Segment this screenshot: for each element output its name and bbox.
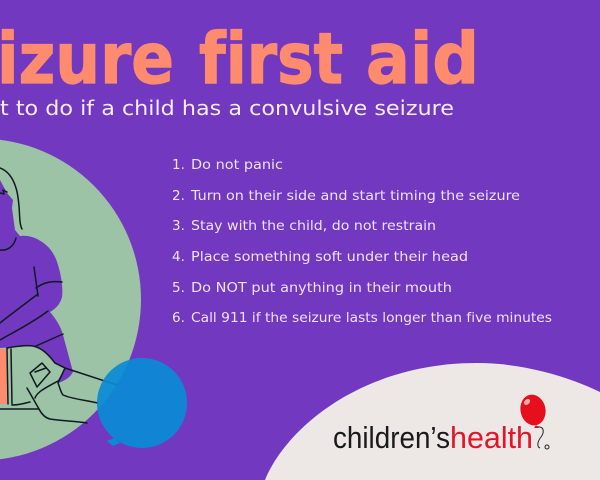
step 5: Do NOT put anything in their mouth xyxy=(191,280,452,296)
step 1: 1. xyxy=(172,157,185,173)
logo: children's health xyxy=(333,392,549,455)
person silhouette xyxy=(0,180,73,383)
step 2: 2. xyxy=(172,188,185,204)
logo wordmark: children’s xyxy=(333,420,450,455)
logo background shape xyxy=(265,363,600,480)
illustration: person kneeling with balloon pillow xyxy=(0,138,187,460)
numbered list of first aid steps xyxy=(172,157,552,326)
step 6: Call 911 if the seizure lasts longer than five minutes xyxy=(191,310,552,326)
step 4: 4. xyxy=(172,249,185,265)
logo balloon icon xyxy=(518,392,549,449)
step 6: 6. xyxy=(172,310,185,326)
step 3: Stay with the child, do not restrain xyxy=(191,218,436,234)
title: aid xyxy=(366,18,479,100)
step 1: Do not panic xyxy=(191,157,283,173)
orange shirt hem xyxy=(0,349,7,404)
logo wordmark xyxy=(333,420,533,455)
step 4: Place something soft under their head xyxy=(191,249,468,265)
green circle backdrop xyxy=(0,138,141,460)
logo wordmark: health xyxy=(450,420,533,455)
outline strokes xyxy=(0,168,117,423)
step 2: Turn on their side and start timing the seizure xyxy=(190,188,520,204)
step 5: 5. xyxy=(172,280,185,296)
step 3: 3. xyxy=(172,218,185,234)
title xyxy=(0,18,479,100)
subtitle: t to do if a child has a convulsive seizure xyxy=(0,96,454,120)
title: izure xyxy=(0,18,174,100)
blue balloon pillow xyxy=(97,358,187,448)
title: first xyxy=(199,18,343,100)
